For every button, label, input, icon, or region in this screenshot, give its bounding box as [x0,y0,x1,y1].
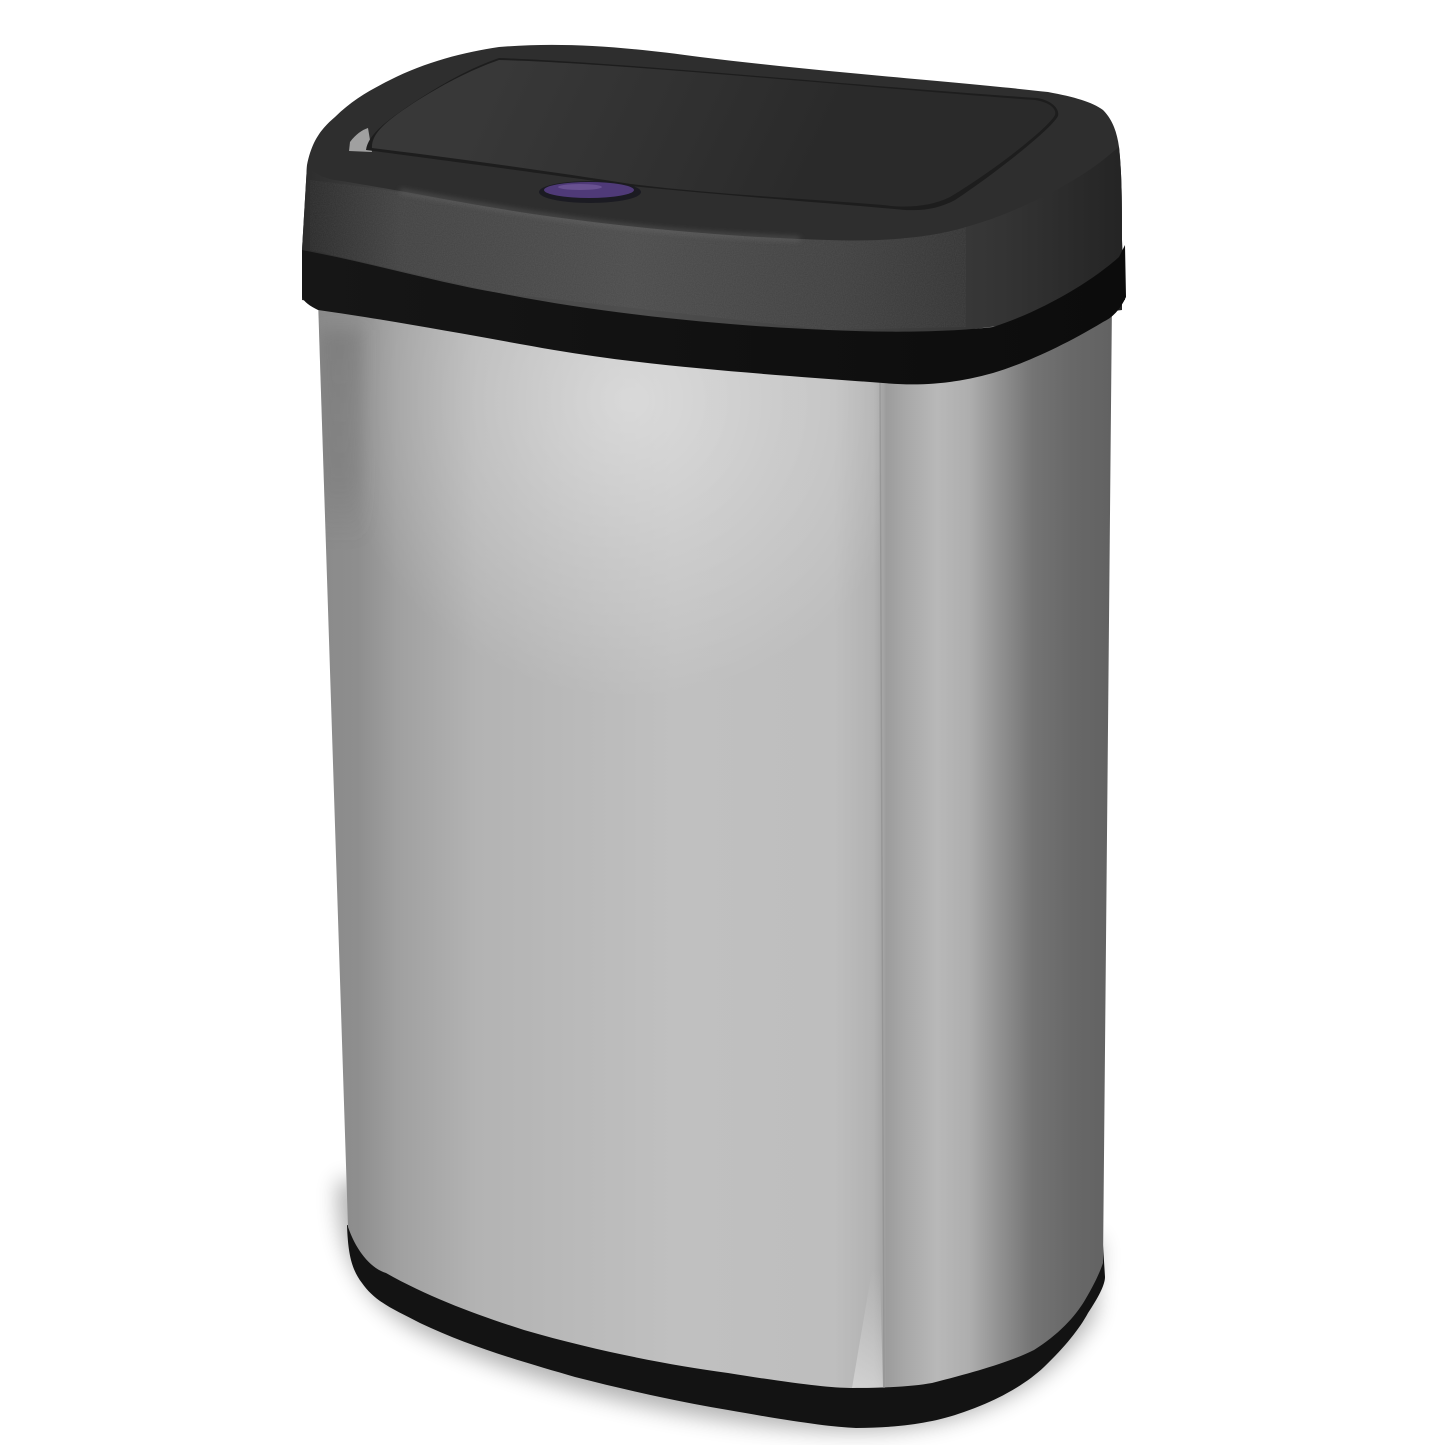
crease highlight [852,1302,883,1388]
base rim [347,1225,1105,1428]
sensor lens [544,182,634,198]
black rim band [302,245,1126,384]
icon: purple motion sensor [539,181,641,203]
floor shadow [338,1180,1100,1431]
lid recess shadow [366,58,1058,210]
sensor reflection [558,184,602,190]
lid opening sliver [349,128,372,152]
corner crease line [880,370,884,1388]
lid outer shell [302,45,1125,350]
lid panel [372,60,1055,206]
lid speckle texture [310,180,966,330]
lid front speckled side [302,147,1122,345]
stainless steel body [318,300,1112,1388]
side strip shading [320,332,362,492]
illustration: stainless steel sensor trash can [302,44,1126,1444]
sensor bezel [539,181,641,203]
body highlight [397,325,832,604]
lid ridge highlight [400,191,800,239]
body base colour [318,300,1112,1388]
lid [302,45,1125,350]
